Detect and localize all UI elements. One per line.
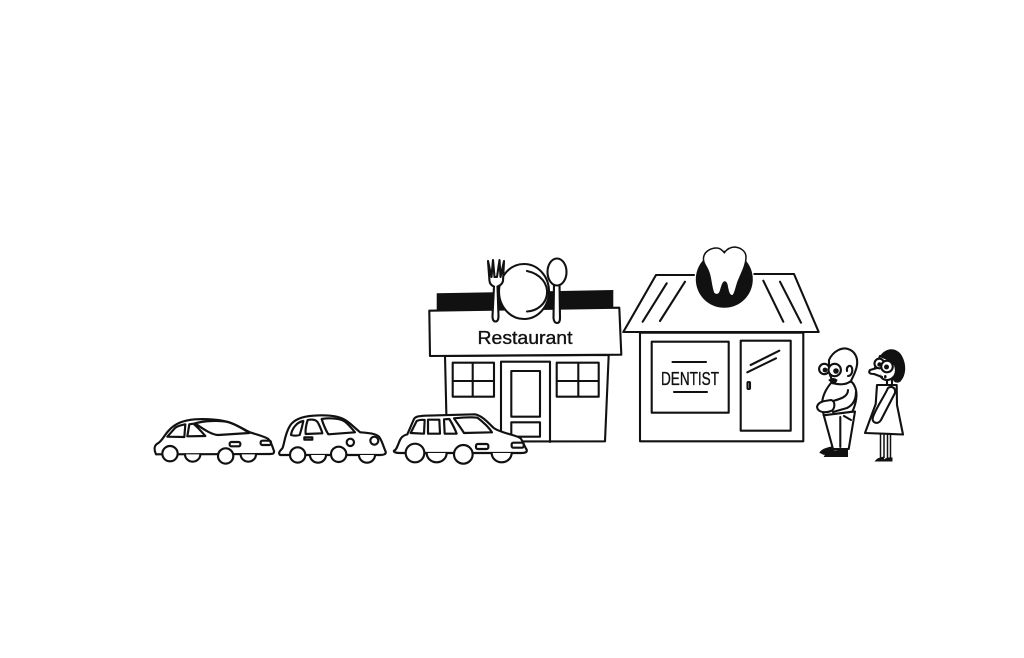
car 3 front wheels [406, 444, 424, 462]
woman face [874, 356, 896, 380]
man trouser crease [840, 416, 851, 447]
car 3 rear wheels [427, 453, 512, 462]
restaurant roof band [437, 290, 613, 312]
tooth sign [696, 247, 753, 308]
man eyes [819, 364, 841, 376]
woman legs [880, 434, 890, 458]
woman neck [887, 379, 892, 385]
dentist roof [623, 274, 819, 332]
left window [453, 363, 494, 397]
woman eyes [874, 359, 893, 372]
dentist window [652, 342, 729, 413]
roof lines [643, 281, 801, 323]
woman nose [869, 368, 882, 377]
restaurant sign text: Restaurant [478, 327, 572, 348]
car 3 windows [411, 417, 492, 434]
man hand [817, 400, 834, 412]
woman dress [865, 385, 903, 434]
car 2 lights [347, 439, 354, 446]
woman arm [873, 387, 895, 423]
car 2 windows [291, 418, 355, 436]
car 1 body [155, 419, 274, 454]
car 2 door handle [304, 437, 312, 440]
man shoes [819, 446, 848, 457]
car 3 body [394, 414, 527, 453]
car 2 front wheels [290, 447, 305, 463]
woman hair [880, 349, 905, 383]
car 1 windows [167, 421, 249, 437]
restaurant sign board [429, 308, 621, 356]
car 3 lights [476, 444, 488, 449]
icon: plate [499, 264, 549, 319]
dentist building [623, 247, 819, 441]
restaurant walls [445, 355, 609, 442]
dentist walls [640, 333, 803, 441]
car 2 rear wheels [310, 455, 375, 463]
woman shoes [874, 456, 892, 462]
dentist door [741, 341, 791, 431]
car 1 front wheels [162, 446, 178, 461]
car 1 lights [230, 442, 240, 446]
sign lines [672, 362, 707, 392]
man mouth [829, 378, 837, 384]
person: man [817, 348, 857, 457]
car 1 rear wheels [185, 454, 256, 462]
person: woman [865, 349, 905, 462]
car 1 [155, 419, 274, 464]
car 2 body [279, 415, 386, 455]
car 2 [279, 415, 386, 463]
car 3 [394, 414, 527, 464]
right window [557, 363, 599, 397]
woman mouth [884, 375, 887, 378]
man ear [847, 366, 852, 376]
icon: spoon [548, 258, 566, 323]
man torso [822, 381, 856, 415]
man head [829, 348, 857, 384]
restaurant door [501, 362, 550, 442]
restaurant building [429, 258, 621, 442]
icon: fork [488, 260, 504, 322]
dentist sign text: DENTIST [661, 369, 719, 389]
man trousers [824, 412, 855, 449]
man arm [833, 390, 856, 412]
